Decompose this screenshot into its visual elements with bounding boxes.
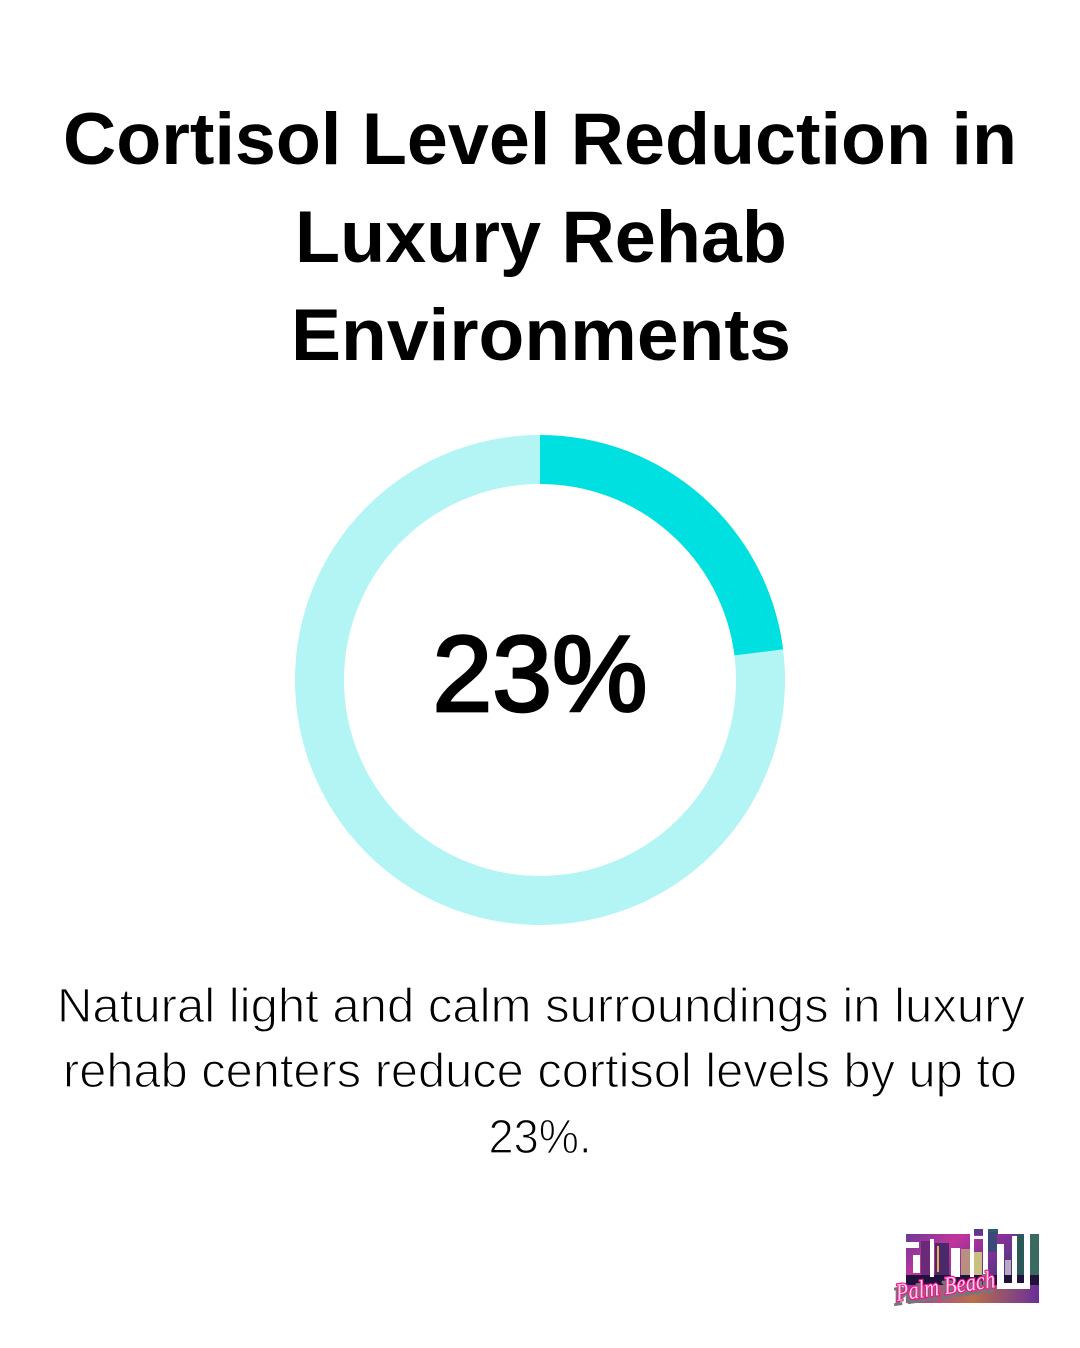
logo script text: Palm Beach: [893, 1266, 997, 1307]
title: Luxury Rehab: [295, 197, 787, 278]
description text: [57, 980, 1025, 1164]
logo script text shadow: Palm Beach: [891, 1270, 995, 1311]
description text: rehab centers reduce cortisol levels by up to: [63, 1045, 1017, 1098]
donut chart: 23%: [320, 435, 783, 900]
logo white letter cut-outs: [906, 1229, 1030, 1289]
description text: 23%.: [488, 1111, 592, 1164]
title: [63, 99, 1017, 376]
logo: Amity Palm Beach: [891, 1229, 1039, 1311]
description text: Natural light and calm surroundings in luxury: [57, 980, 1025, 1033]
donut value: 23%: [432, 613, 648, 734]
title: Environments: [291, 295, 791, 376]
donut highlighted segment: [540, 435, 783, 655]
donut track: [320, 460, 760, 900]
logo city image band: [906, 1229, 1039, 1303]
title: Cortisol Level Reduction in: [63, 99, 1017, 180]
